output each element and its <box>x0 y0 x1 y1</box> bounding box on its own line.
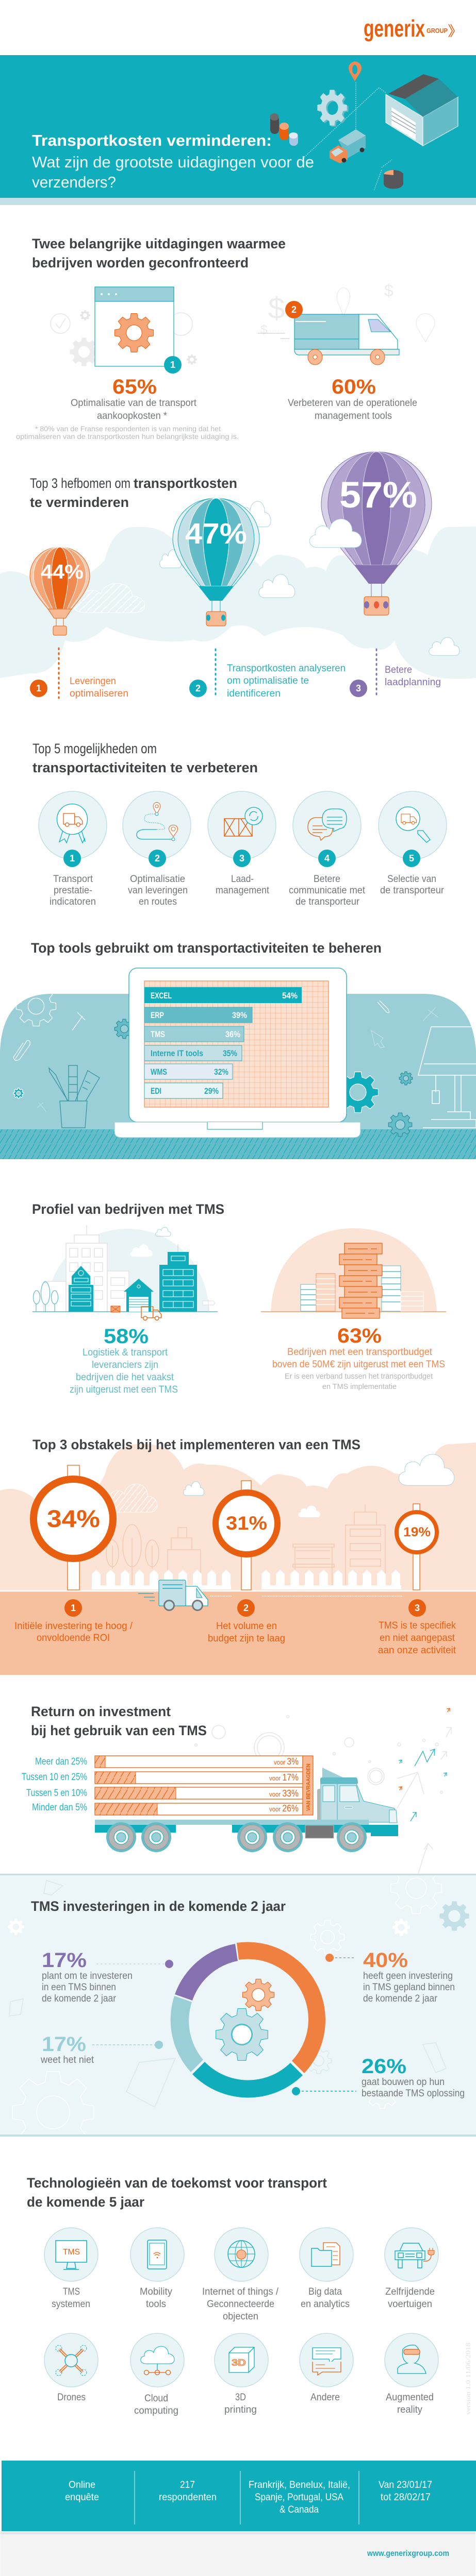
item 1: prestatie-indicatoren: 1 <box>70 853 75 863</box>
obstacle 3: aan onze activiteit <box>378 1645 456 1656</box>
stat: 60% <box>288 376 417 421</box>
chassis <box>95 1820 398 1852</box>
obstacle 3: TMS is te specifiek <box>379 1620 456 1631</box>
heading <box>32 741 258 775</box>
bar: interne it tools: 35% <box>223 1048 237 1058</box>
tech: TMS systemen: systemen <box>52 2299 90 2310</box>
item 5: selectie: Selectie van <box>387 874 436 885</box>
heading: Top 3 obstakels bij het implementeren van een TMS <box>32 1437 360 1452</box>
truck with bar chart load <box>95 1768 398 1852</box>
callout: 17% plant: in een TMS binnen <box>42 1982 116 1993</box>
decorative desk objects right <box>337 1001 438 1137</box>
title: Wat zijn de grootste uidagingen voor de <box>32 153 314 171</box>
tech: 3D printing: printing <box>224 2404 257 2415</box>
lever 3: Betere <box>385 665 412 675</box>
obstacle 2: 2 <box>243 1603 249 1613</box>
lever 2: om optimalisatie te <box>227 675 309 686</box>
stat: 63%: boven de 50M€ zijn uitgerust met een TMS <box>272 1359 445 1370</box>
callout: 40%: de komende 2 jaar <box>363 1993 438 2004</box>
obstacle 3: 3 <box>415 1603 420 1613</box>
countries: Frankrijk, Benelux, Italië, <box>249 2480 350 2490</box>
heading: Twee belangrijke uitdagingen waarmee <box>32 236 286 251</box>
tech: big data <box>300 2228 353 2310</box>
stat: 63%: Bedrijven met een transportbudget <box>287 1347 433 1358</box>
bar: excel: EXCEL <box>151 991 172 1001</box>
bar: meer dan 25% <box>35 1756 303 1768</box>
lever 3 <box>350 649 441 698</box>
segment: 17% purple <box>175 1944 238 2001</box>
lever 1 <box>30 648 128 699</box>
item 3: laadmanagement: Laad- <box>231 874 254 885</box>
pencil cup <box>49 1065 100 1128</box>
item 5: selectie: 5 <box>409 853 414 863</box>
stat: 58%: zijn uitgerust met een TMS <box>70 1384 178 1395</box>
illustration: isometric logistics scene <box>270 61 458 191</box>
item 3: laadmanagement: management <box>216 885 270 896</box>
panel: two challenges <box>16 236 435 440</box>
callout: 40%: 40% <box>363 1949 408 1972</box>
tech: TMS systemen: TMS <box>63 2248 80 2257</box>
heading: Top 3 hefbomen om <box>30 476 130 491</box>
tech: mobility tools <box>130 2228 184 2310</box>
bar: tussen 5 en 10% <box>26 1787 303 1799</box>
bar: minder dan 5%: voor 26% <box>269 1803 299 1814</box>
decorative coins and arrows <box>195 1716 451 1875</box>
tech: internet of things: objecten <box>223 2311 258 2322</box>
illustration: delivery van <box>258 281 435 365</box>
lever 1: Leveringen <box>70 676 116 687</box>
bar: tussen 5 en 10%: Tussen 5 en 10% <box>26 1788 87 1799</box>
panel: top 3 obstacles <box>0 1437 476 1675</box>
footnote <box>16 425 239 440</box>
heading: te verminderen <box>30 495 129 510</box>
logo: generix group: generix <box>364 15 425 42</box>
bar: wms: WMS <box>151 1067 167 1077</box>
dates: Van 23/01/17 <box>379 2480 432 2490</box>
respondents <box>159 2480 217 2503</box>
heading: Top tools gebruikt om transportactiviteiten te beheren <box>31 940 382 956</box>
panel: survey footer <box>1 2461 476 2576</box>
obstacle 1: 1 <box>71 1603 76 1613</box>
lever 1: 1 <box>36 683 41 693</box>
bar: tussen 5 en 10%: voor 33% <box>269 1788 299 1799</box>
obstacle 1: onvoldoende ROI <box>37 1633 110 1643</box>
cab <box>317 1768 397 1823</box>
stat: 60%: Verbeteren van de operationele <box>288 398 417 409</box>
item 4: communicatie: de transporteur <box>296 896 360 907</box>
item 2: leveringen en routes <box>123 791 191 907</box>
sign: 19% <box>397 1504 437 1590</box>
bar: wms <box>144 1064 233 1079</box>
bar: edi <box>144 1083 223 1098</box>
lever 2: identificeren <box>227 688 281 699</box>
tech: internet of things: Geconnecteerde <box>207 2299 274 2310</box>
countries <box>249 2480 350 2515</box>
panel: top tools <box>0 940 476 1159</box>
callout: 26%: 26% <box>362 2055 406 2078</box>
bar: erp: 39% <box>232 1010 247 1020</box>
dates <box>379 2480 432 2503</box>
stat: 65%: Optimalisatie van de transport <box>71 398 197 409</box>
desk surface <box>0 1129 476 1159</box>
tech: big data: en analytics <box>301 2299 350 2310</box>
heading: bij het gebruik van een TMS <box>31 1723 207 1738</box>
tech: cloud computing: computing <box>134 2405 178 2416</box>
lever 3: 3 <box>356 683 361 693</box>
obstacle 2 <box>208 1599 285 1644</box>
footnote: optimaliseren van de transportkosten hun belangrijkste uidaging is. <box>16 432 239 440</box>
obstacle 1 <box>14 1599 133 1643</box>
laptop <box>114 968 360 1138</box>
version note: version 1.0 11/06/2018 <box>464 2343 472 2415</box>
tech: cloud computing: Cloud <box>144 2393 168 2404</box>
illustration: delivery van: 2 <box>291 304 297 315</box>
balloon: orange 44% <box>30 547 90 635</box>
floor <box>0 1591 476 1675</box>
stat: 58%: leveranciers zijn <box>92 1360 158 1370</box>
stat: 58% <box>70 1325 178 1395</box>
tech: mobility tools: tools <box>146 2299 166 2310</box>
illustration: delivery van: $ <box>260 323 267 337</box>
clouds behind balloons <box>74 501 459 655</box>
stat: 58%: Logistiek & transport <box>83 1347 168 1358</box>
item 2: leveringen en routes: van leveringen <box>128 885 188 896</box>
tech: augmented reality: reality <box>397 2404 422 2415</box>
stat: 63%: Er is een verband tussen het transportbudget <box>285 1372 433 1381</box>
fences <box>92 1570 401 1589</box>
bar: erp <box>144 1007 252 1023</box>
stat: 60%: management tools <box>315 411 392 421</box>
heading: bedrijven worden geconfronteerd <box>32 255 249 270</box>
obstacle 3 <box>378 1599 456 1656</box>
callout: 26%: gaat bouwen op hun <box>362 2077 445 2088</box>
item 2: leveringen en routes: Optimalisatie <box>130 874 185 885</box>
item 4: communicatie: 4 <box>324 853 330 863</box>
balloon: purple 57% <box>309 452 432 615</box>
tech: 3D printing: 3D <box>235 2392 246 2403</box>
callout: 40%: in TMS gepland binnen <box>363 1982 455 1993</box>
tech: internet of things <box>202 2228 279 2322</box>
survey method: enquête <box>65 2492 99 2503</box>
balloon: teal 47%: 47% <box>185 517 247 550</box>
decorative growth arrows <box>399 1708 450 1821</box>
bar: tussen 10 en 25%: Tussen 10 en 25% <box>22 1772 87 1783</box>
heading: Return on investment <box>31 1704 171 1719</box>
survey method: Online <box>69 2480 95 2490</box>
bar: meer dan 25%: voor 3% <box>274 1756 299 1767</box>
tech: andere <box>300 2333 353 2403</box>
item 4: communicatie <box>289 791 366 907</box>
sign: 34%: 34% <box>47 1505 100 1532</box>
bar: tms: 36% <box>225 1029 240 1039</box>
tech: drones: Drones <box>57 2392 86 2403</box>
wheels <box>109 1825 364 1850</box>
illustration: delivery van: $ <box>384 281 393 300</box>
panel: technologies of the future <box>27 2175 472 2416</box>
item 1: prestatie-indicatoren: prestatie- <box>54 885 92 896</box>
background clouds <box>0 527 476 679</box>
heading: Technologieën van de toekomst voor transport <box>27 2175 327 2191</box>
title: Transportkosten verminderen: <box>32 131 272 149</box>
illustration: city <box>32 1225 218 1320</box>
background clouds <box>0 1443 476 1591</box>
stat: 65%: 65% <box>112 376 157 398</box>
sign: 34% <box>34 1465 113 1590</box>
roi bars <box>22 1756 313 1815</box>
heading: TMS investeringen in de komende 2 jaar <box>31 1899 286 1914</box>
tech: 3D printing: 3D <box>232 2358 246 2368</box>
bar: tms <box>144 1026 244 1042</box>
segment: 40% <box>237 1942 325 2073</box>
survey method <box>65 2480 99 2503</box>
donut chart <box>171 1942 325 2097</box>
panel: top 3 levers with balloons <box>0 452 476 699</box>
website: www.generixgroup.com <box>367 2549 449 2558</box>
item 3: laadmanagement: 3 <box>239 853 244 863</box>
heading <box>32 236 286 270</box>
title: verzenders? <box>32 173 116 191</box>
countries: & Canada <box>280 2504 319 2515</box>
stat: 65%: aankoopkosten * <box>97 411 168 421</box>
tech: big data: Big data <box>308 2286 342 2297</box>
tech: cloud computing <box>130 2333 184 2416</box>
heading: Top 5 mogelijkheden om <box>32 741 157 756</box>
obstacle 2: budget zijn te laag <box>208 1633 285 1644</box>
stat: 65% <box>71 376 197 421</box>
panel: return on investment <box>22 1704 451 1875</box>
side label: van bevraagden: VAN BEVRAAGDEN <box>306 1764 311 1811</box>
lever 2 <box>189 649 346 699</box>
panel: TMS investments <box>0 1863 476 2153</box>
bar: interne it tools <box>144 1045 242 1061</box>
illustration: browser window with gear <box>51 287 197 374</box>
illustration: browser window with gear: 1 <box>170 360 175 370</box>
decorative gears and hourglasses <box>8 1863 469 2153</box>
callout: 40% <box>325 1949 455 2004</box>
item 2: leveringen en routes: en routes <box>139 896 177 907</box>
callout: 17% plant: plant om te investeren <box>42 1971 133 1981</box>
bar: meer dan 25%: Meer dan 25% <box>35 1756 87 1767</box>
bar: interne it tools: Interne IT tools <box>151 1048 203 1058</box>
bar: minder dan 5% <box>32 1802 303 1815</box>
balloon: orange 44%: 44% <box>41 561 84 583</box>
bar: edi: 29% <box>204 1086 219 1096</box>
lamp <box>418 1027 476 1128</box>
heading <box>31 1704 207 1738</box>
tech: andere: Andere <box>310 2392 340 2403</box>
callout: 17% plant: 17% <box>42 1949 87 1972</box>
bar: excel <box>144 987 302 1003</box>
dates: tot 28/02/17 <box>381 2492 431 2503</box>
illustration: pallet stack <box>261 1228 446 1318</box>
item 5: selectie: de transporteur <box>380 885 445 896</box>
callout: 17% plant <box>42 1949 173 2004</box>
item 4: communicatie: Betere <box>314 874 340 885</box>
bar: erp: ERP <box>151 1010 164 1020</box>
lever 2: 2 <box>195 683 201 693</box>
heading <box>27 2175 327 2210</box>
tech: augmented reality <box>385 2333 438 2415</box>
segment: 26% <box>192 2062 303 2097</box>
side label: van bevraagden <box>303 1756 313 1815</box>
balloon: purple 57%: 57% <box>339 475 417 516</box>
respondents: respondenten <box>159 2492 217 2503</box>
heading <box>30 476 237 510</box>
heading: Profiel van bedrijven met TMS <box>32 1201 224 1217</box>
lever 3: laadplanning <box>385 677 441 688</box>
bar: edi: EDI <box>151 1086 161 1096</box>
segment: 17% light <box>171 1996 203 2072</box>
tech: zelfrijdende voertuigen: Zelfrijdende <box>385 2286 435 2297</box>
illustration: delivery van: $ <box>268 292 285 325</box>
respondents: 217 <box>180 2480 195 2490</box>
item 2: leveringen en routes: 2 <box>155 853 160 863</box>
tech: internet of things: Internet of things / <box>202 2286 279 2297</box>
stat: 63%: en TMS implementatie <box>322 1382 397 1391</box>
bar: wms: 32% <box>214 1067 228 1077</box>
decorative desk objects left <box>13 986 134 1112</box>
lever 2: Transportkosten analyseren <box>227 663 346 674</box>
heading: transportkosten <box>134 476 237 491</box>
bar: tussen 10 en 25%: voor 17% <box>269 1772 299 1783</box>
bar: excel: 54% <box>282 991 298 1001</box>
obstacle 3: en niet aangepast <box>380 1633 455 1643</box>
countries: Spanje, Portugal, USA <box>255 2492 343 2503</box>
logo: generix group: GROUP <box>426 27 448 35</box>
item 5: selectie <box>379 791 447 896</box>
tech: TMS systemen: TMS <box>63 2286 80 2297</box>
tech: augmented reality: Augmented <box>386 2392 434 2403</box>
callout: 17% weet niet: 17% <box>42 2033 86 2056</box>
delivery truck <box>138 1580 402 1611</box>
item 1: prestatie-indicatoren <box>39 791 107 907</box>
callout: 17% weet niet <box>40 2033 163 2065</box>
obstacle 2: Het volume en <box>216 1621 277 1632</box>
callout: 26%: bestaande TMS oplossing <box>362 2088 465 2099</box>
item 3: laadmanagement <box>208 791 276 896</box>
bar: tussen 10 en 25% <box>22 1772 303 1784</box>
sign: 31%: 31% <box>226 1513 267 1534</box>
tech: drones <box>44 2333 98 2403</box>
tech: mobility tools: Mobility <box>140 2286 172 2297</box>
sign: 19%: 19% <box>403 1525 431 1539</box>
tech: TMS systemen <box>44 2228 98 2310</box>
tech: zelfrijdende voertuigen <box>385 2228 438 2310</box>
stat: 63%: 63% <box>337 1325 382 1347</box>
callout: 17% plant: de komende 2 jaar <box>42 1993 117 2004</box>
sign: 31% <box>216 1481 277 1590</box>
stat: 60%: 60% <box>332 376 376 398</box>
heading: de komende 5 jaar <box>27 2194 144 2210</box>
callout: 40%: heeft geen investering <box>363 1971 453 1981</box>
obstacle 1: Initiële investering te hoog / <box>14 1621 133 1632</box>
panel: top 5 possibilities <box>32 741 447 907</box>
item 4: communicatie: communicatie met <box>289 885 366 896</box>
lever 1: optimaliseren <box>70 688 128 699</box>
panel: header banner <box>0 55 476 205</box>
footnote: * 80% van de Franse respondenten is van mening dat het <box>35 425 221 433</box>
stat: 58%: 58% <box>104 1325 149 1348</box>
desk background <box>0 994 476 1129</box>
callout: 26% <box>292 2055 465 2099</box>
stat: 58%: bedrijven die het vaakst <box>76 1372 174 1383</box>
tech: 3D printing <box>215 2333 268 2415</box>
balloon: teal 47% <box>173 498 259 626</box>
panel: company profile with TMS <box>32 1201 446 1395</box>
heading: transportactiviteiten te verbeteren <box>32 760 258 775</box>
center gears <box>216 1979 274 2060</box>
bar: minder dan 5%: Minder dan 5% <box>32 1802 87 1813</box>
title <box>32 131 314 191</box>
item 1: prestatie-indicatoren: indicatoren <box>50 896 96 907</box>
bar: tms: TMS <box>151 1029 165 1039</box>
callout: 17% weet niet: weet het niet <box>40 2055 94 2065</box>
stat: 63% <box>272 1325 445 1391</box>
background town and clouds <box>104 1454 454 1587</box>
item 1: prestatie-indicatoren: Transport <box>53 874 93 885</box>
tech: zelfrijdende voertuigen: voertuigen <box>388 2299 432 2310</box>
bar chart <box>144 981 329 1107</box>
